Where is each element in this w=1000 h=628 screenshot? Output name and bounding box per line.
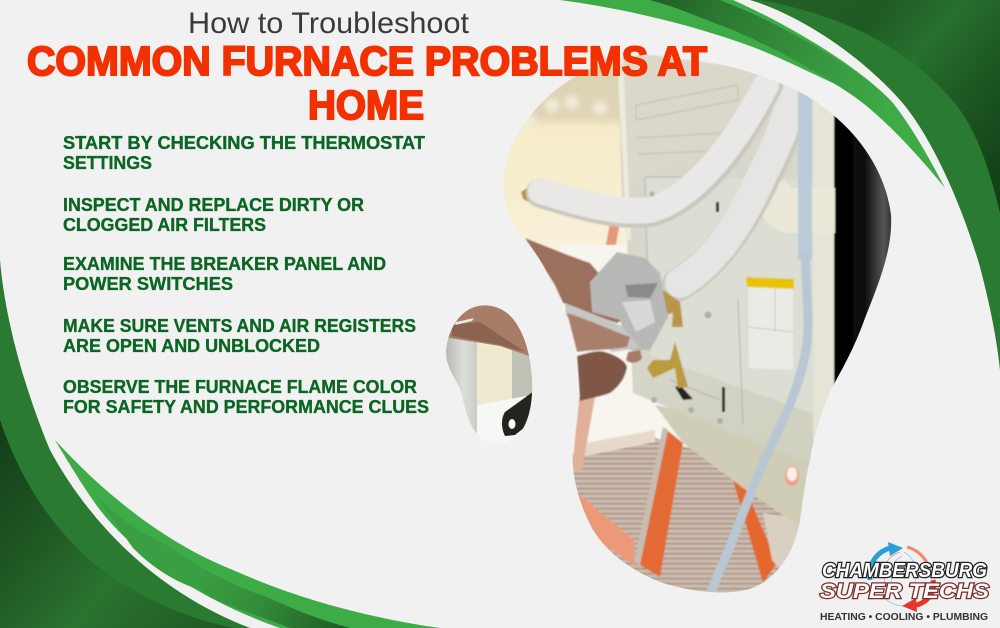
thumb tip [626, 350, 642, 363]
ladder highlight [634, 427, 668, 565]
hand skin top finger [525, 238, 628, 323]
mid green blade [650, 0, 885, 118]
white lower [477, 395, 532, 450]
brass valve lower [647, 342, 688, 388]
orange spot on casing [785, 466, 799, 486]
darkest corner shade [760, 0, 1000, 213]
tip 5: FOR SAFETY AND PERFORMANCE CLUES [63, 396, 429, 417]
subtitle: How to Troubleshoot [188, 7, 469, 40]
wrench jaw bright [622, 300, 655, 332]
wrench handle [565, 303, 640, 352]
lower hand [577, 351, 627, 401]
tip 1: SETTINGS [63, 152, 152, 173]
sleeve glint [455, 318, 474, 325]
cream band [477, 345, 512, 405]
tip 4: ARE OPEN AND UNBLOCKED [63, 335, 320, 356]
logo wordmark bottom: SUPER TECHS [820, 580, 989, 603]
insulated pipe 1 [541, 85, 766, 211]
logo tagline: HEATING • COOLING • PLUMBING [820, 612, 988, 623]
vent ribs [636, 85, 740, 154]
condenser coil [570, 438, 800, 600]
brass valve upper [662, 290, 684, 328]
unit side panel [617, 50, 836, 470]
lower background white [560, 245, 840, 605]
logo: Chambersburg Super Techs [820, 542, 989, 623]
yellow label [746, 277, 794, 289]
pale column right of cable [813, 100, 835, 440]
grey left [440, 335, 477, 450]
pale ledge [575, 430, 655, 458]
small blob base [440, 300, 540, 450]
bracket hole [508, 419, 516, 429]
insulated pipe 2 [680, 85, 793, 283]
pipe shadow 2 [678, 85, 795, 285]
blue cable upper [798, 85, 812, 260]
darkest corner shade [0, 420, 235, 628]
blurred bokeh [505, 95, 607, 129]
black slots [675, 202, 725, 412]
blue cable [710, 250, 808, 595]
ladder to left [572, 397, 595, 470]
photo: technician servicing unit in blob [500, 50, 895, 605]
heading line 1: COMMON FURNACE PROBLEMS AT [27, 38, 707, 84]
beige triangle under casing [763, 513, 805, 575]
wrench head [590, 252, 668, 350]
white label [748, 287, 793, 370]
troubleshooting tips list [63, 132, 429, 417]
photo background [503, 60, 628, 270]
logo center hatching [883, 552, 917, 606]
tip 5: OBSERVE THE FURNACE FLAME COLOR [63, 376, 417, 397]
plate lines [645, 177, 743, 425]
logo salmon arc [907, 547, 930, 570]
logo wordmark top: CHAMBERSBURG [822, 559, 987, 582]
light green blade [560, 0, 945, 188]
dark green corner band [750, 0, 1000, 370]
reddish smudge [605, 225, 620, 246]
black area at right [833, 115, 892, 386]
orange ladder brace [573, 492, 634, 565]
logo blue arrow head [888, 542, 903, 556]
lower unit casing [655, 405, 840, 530]
wrench [565, 252, 668, 352]
lower fingers [567, 313, 630, 352]
dark green corner band [0, 260, 250, 628]
tip 3: EXAMINE THE BREAKER PANEL AND [63, 253, 386, 274]
tip 4: MAKE SURE VENTS AND AIR REGISTERS [63, 315, 416, 336]
screws [650, 192, 723, 424]
logo red arc arrow [912, 580, 934, 606]
logo red arrow head [902, 598, 917, 612]
forearm shadow [452, 322, 525, 352]
mid green blade [95, 495, 350, 628]
title [27, 7, 707, 128]
lower service plate [646, 179, 813, 414]
bottom left green swoosh [0, 260, 440, 628]
tip 2: INSPECT AND REPLACE DIRTY OR [63, 194, 364, 215]
pipe shadow 1 [541, 85, 768, 213]
top right green swoosh [560, 0, 1000, 370]
tip 2: CLOGGED AIR FILTERS [63, 214, 266, 235]
orange ladder leg [637, 427, 683, 577]
panel edge [617, 55, 631, 240]
black bracket [502, 391, 534, 436]
light green blade [55, 440, 440, 628]
cream bracket [757, 181, 835, 233]
right ladder leg [733, 480, 777, 583]
forearm skin [440, 300, 535, 358]
tip 1: START BY CHECKING THE THERMOSTAT [63, 132, 426, 153]
pipe end fitting [520, 188, 530, 202]
photo: small blob crop [440, 300, 540, 450]
logo blue arc arrow [870, 547, 894, 580]
wrench jaw dark [625, 283, 658, 298]
green-grey right [512, 345, 534, 400]
heading line 2: HOME [308, 82, 424, 128]
tip 3: POWER SWITCHES [63, 273, 233, 294]
